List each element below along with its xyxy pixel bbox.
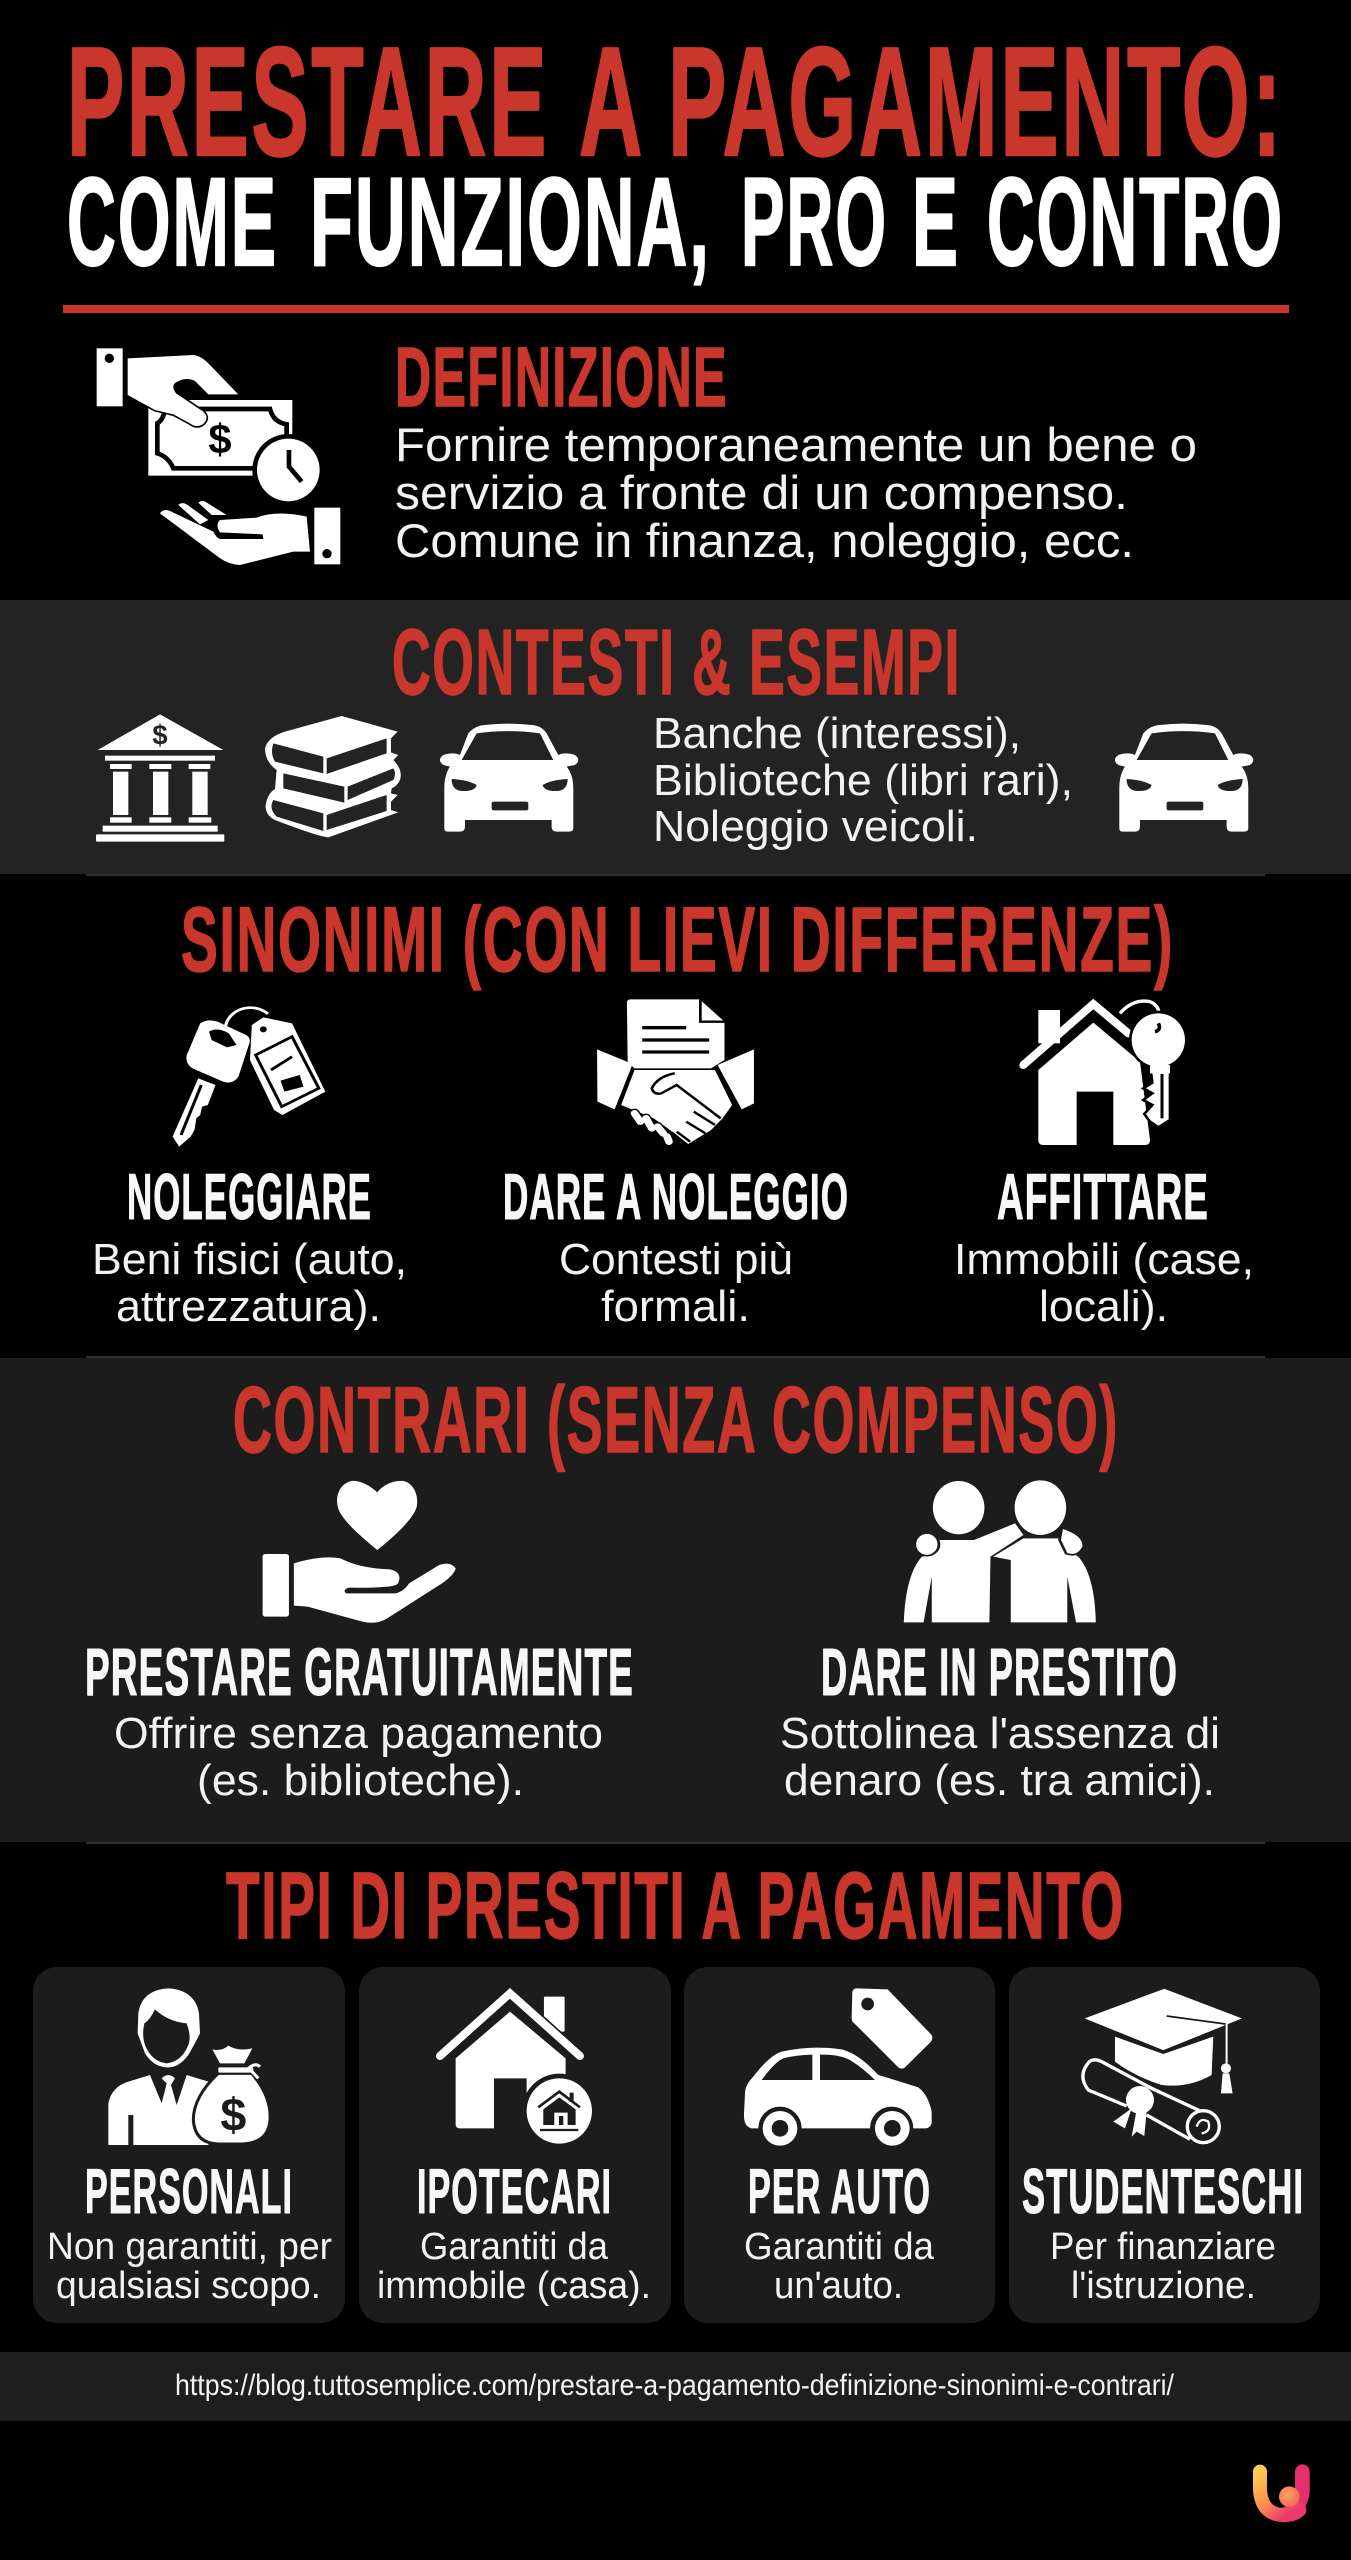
title: COME xyxy=(67,153,278,292)
description: studenteschi: l'istruzione. xyxy=(1071,2265,1256,2307)
icon: graduation cap and diploma xyxy=(1081,1987,1246,2143)
description: noleggiare xyxy=(92,1235,407,1331)
description: dare in prestito: Sottolinea l'assenza di xyxy=(780,1709,1220,1758)
description: affittare: locali). xyxy=(1039,1282,1168,1331)
title: PRO xyxy=(741,153,888,292)
column: noleggiare xyxy=(92,1008,407,1331)
icon: car keys with tag xyxy=(173,1008,325,1147)
icon: car front xyxy=(440,724,578,832)
title: FUNZIONA, xyxy=(310,153,711,292)
description: ipotecari: Garantiti da xyxy=(420,2226,609,2268)
panel: sinonimi xyxy=(92,889,1254,1331)
icon: house with key xyxy=(1023,1001,1188,1145)
description: noleggiare: Beni fisici (auto, xyxy=(92,1235,407,1284)
description: noleggiare: attrezzatura). xyxy=(116,1282,381,1331)
icon: person with money bag xyxy=(108,1988,270,2145)
description: dare in prestito xyxy=(780,1709,1220,1805)
text: contexts: Noleggio veicoli. xyxy=(653,802,978,851)
description: affittare xyxy=(954,1235,1254,1331)
description: dare in prestito: denaro (es. tra amici). xyxy=(784,1756,1215,1805)
description: prestare gratuitamente: (es. biblioteche). xyxy=(197,1756,524,1805)
icon: bank xyxy=(96,714,224,842)
title: A xyxy=(579,15,645,188)
text: contexts: Biblioteche (libri rari), xyxy=(653,756,1073,805)
icon: person with money bag: $ xyxy=(220,2089,246,2141)
card: per auto xyxy=(684,1967,995,2323)
icon: bank: $ xyxy=(152,719,168,750)
panel: definizione xyxy=(97,330,1197,567)
icon: hands exchanging money with clock: $ xyxy=(208,415,232,462)
description: studenteschi xyxy=(1050,2226,1276,2307)
column: dare in prestito xyxy=(780,1480,1220,1805)
icon: car front right xyxy=(1115,724,1253,832)
panel: contrari xyxy=(0,1356,1351,1844)
text: definition: servizio a fronte di un compenso. xyxy=(395,466,1128,519)
description: dare a noleggio xyxy=(559,1235,793,1331)
text: definition: Comune in finanza, noleggio, ecc. xyxy=(395,514,1134,567)
description: affittare: Immobili (case, xyxy=(954,1235,1254,1284)
description: dare a noleggio: formali. xyxy=(601,1282,750,1331)
column: prestare gratuitamente xyxy=(85,1481,634,1805)
icon: hands exchanging money with clock xyxy=(97,348,340,565)
card: ipotecari xyxy=(359,1967,671,2323)
title: PRESTARE xyxy=(67,15,549,188)
description: per auto: Garantiti da xyxy=(744,2226,935,2268)
description: per auto: un'auto. xyxy=(774,2265,903,2307)
description: dare a noleggio: Contesti più xyxy=(559,1235,793,1284)
description: prestare gratuitamente: Offrire senza pagamento xyxy=(114,1709,603,1758)
icon: hand with heart xyxy=(263,1481,456,1623)
description: prestare gratuitamente xyxy=(114,1709,603,1805)
label: noleggiare: NOLEGGIARE xyxy=(127,1160,372,1233)
description: personali: Non garantiti, per xyxy=(47,2226,332,2268)
icon: two friends embracing xyxy=(904,1480,1096,1622)
text: definition xyxy=(395,418,1197,567)
description: ipotecari xyxy=(377,2226,651,2307)
heading: contesti: CONTESTI & ESEMPI xyxy=(392,610,961,714)
title xyxy=(67,15,1284,292)
label: dare a noleggio: DARE A NOLEGGIO xyxy=(503,1160,849,1233)
description: per auto xyxy=(744,2226,935,2307)
heading: definizione: DEFINIZIONE xyxy=(395,330,728,424)
panel: contesti ed esempi xyxy=(0,600,1351,876)
label: personali: PERSONALI xyxy=(85,2157,293,2227)
icon: books xyxy=(265,716,401,837)
icon: car with price tag xyxy=(744,1988,932,2146)
description: studenteschi: Per finanziare xyxy=(1050,2226,1276,2268)
text: definition: Fornire temporaneamente un bene o xyxy=(395,418,1197,471)
label: per auto: PER AUTO xyxy=(748,2157,931,2227)
description: personali xyxy=(47,2226,332,2307)
text: contexts xyxy=(653,709,1073,851)
label: prestare gratuitamente: PRESTARE GRATUITAMENTE xyxy=(85,1635,634,1710)
panel: tipi di prestiti xyxy=(33,1853,1320,2323)
footer band with URL xyxy=(0,2352,1351,2421)
card: personali xyxy=(33,1967,345,2323)
title: E xyxy=(912,153,960,292)
icon: house with badge xyxy=(440,1993,597,2148)
description: personali: qualsiasi scopo. xyxy=(56,2265,321,2307)
column: affittare xyxy=(954,1001,1254,1331)
description: ipotecari: immobile (casa). xyxy=(377,2265,651,2307)
card: studenteschi xyxy=(1009,1967,1320,2323)
text: contexts: Banche (interessi), xyxy=(653,709,1021,758)
label: ipotecari: IPOTECARI xyxy=(417,2157,612,2227)
logo xyxy=(1260,2472,1302,2515)
column: dare a noleggio xyxy=(503,999,849,1331)
icon: contract and handshake xyxy=(597,999,754,1144)
footer band with URL: https://blog.tuttosemplice.com/prestare-a-pagamento-definizione-sinonimi-e-contrari/ xyxy=(175,2369,1175,2402)
